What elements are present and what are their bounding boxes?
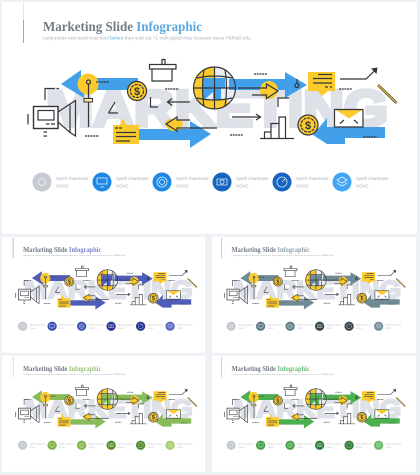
- icon: yellow pin: [78, 74, 98, 127]
- icon: small line arrows and corners: [85, 74, 396, 137]
- panel: indigo slide: [2, 237, 205, 353]
- icon row: labels: Synth chartreuse: [296, 176, 329, 181]
- icon row: XOXO: [297, 447, 303, 449]
- icon: speech bubble bottom: [113, 118, 139, 144]
- icon row: labels: Synth chartreuse: [116, 176, 149, 181]
- icon: bar chart: [260, 117, 294, 138]
- icon: globe: [193, 67, 237, 110]
- icon row: labels: XOXO: [356, 184, 369, 188]
- icon row: Synth chartreuse: [385, 323, 402, 326]
- icon row: XOXO: [177, 447, 183, 449]
- arrow: bottom right: [313, 118, 385, 144]
- icon row: XOXO: [326, 328, 333, 330]
- giant word: MARKETING: [25, 396, 193, 424]
- giant word: MARKETING: [25, 277, 193, 305]
- icon row: XOXO: [238, 447, 244, 449]
- icon row: XOXO: [147, 328, 154, 330]
- icon row: [226, 441, 402, 450]
- icon 1: gray gear: [32, 172, 52, 192]
- icon row: Synth chartreuse: [147, 442, 164, 445]
- panel: main blue slide: [2, 2, 417, 234]
- icon: coin top: $: [134, 86, 140, 98]
- illustration: [224, 385, 405, 429]
- icon row: XOXO: [326, 447, 333, 449]
- icon row: Synth chartreuse: [268, 442, 284, 445]
- accent bar: [23, 2, 24, 43]
- icon row: Synth chartreuse: [59, 323, 76, 326]
- giant word: MARKETING: [233, 277, 401, 305]
- icon row: XOXO: [118, 447, 124, 449]
- giant word: MARKETING: [233, 396, 401, 424]
- icon row: XOXO: [59, 328, 65, 330]
- icon: speech bubble top: [308, 72, 335, 96]
- icon row: Synth chartreuse: [30, 323, 46, 326]
- icon row: labels: Synth chartreuse: [56, 176, 89, 181]
- illustration: arrows and line icons: [28, 60, 396, 148]
- icon row: Synth chartreuse: [297, 323, 314, 326]
- icon: basket: [150, 60, 176, 81]
- accent bar: [12, 357, 15, 377]
- icon row: Synth chartreuse: [385, 442, 402, 445]
- icon row: XOXO: [59, 447, 65, 449]
- panel: light green slide: [2, 356, 205, 472]
- arrow: bottom middle: [139, 121, 211, 148]
- subtitle: Letterpress next level trust fund before they sold out +1 meh gluten-free locavore tacos PBR&B tofu.: [232, 254, 335, 257]
- icon row: Synth chartreuse: [326, 442, 343, 445]
- icon row: Synth chartreuse: [147, 323, 164, 326]
- icon: coin top: [128, 82, 146, 100]
- icon row: XOXO: [297, 328, 303, 330]
- icon: coin bottom: $: [305, 120, 311, 132]
- icon row: XOXO: [30, 328, 36, 330]
- title: Marketing Slide Infographic: [43, 20, 202, 35]
- icon row: XOXO: [30, 447, 36, 449]
- icon row: XOXO: [385, 447, 392, 449]
- icon: arrow outline left: [165, 117, 217, 131]
- icon 2: monitor: [92, 172, 112, 192]
- icon row: XOXO: [118, 328, 124, 330]
- icon row: XOXO: [89, 328, 95, 330]
- icon 3: target: [152, 172, 172, 192]
- icon: coin bottom: [298, 115, 318, 135]
- icon row: XOXO: [268, 447, 274, 449]
- icon row: XOXO: [356, 328, 362, 330]
- subtitle: Letterpress next level trust fund before they sold out +1 meh gluten-free locavore tacos PBR&B tofu.: [232, 373, 335, 376]
- icon row: Synth chartreuse: [118, 442, 135, 445]
- icon row: [226, 322, 402, 331]
- icon row: Synth chartreuse: [30, 442, 46, 445]
- icon 5: gauge: [272, 172, 292, 192]
- icon row: XOXO: [356, 447, 362, 449]
- icon row: XOXO: [89, 447, 95, 449]
- subtitle: Letterpress next level trust fund before they sold out +1 meh gluten-free locavore tacos PBR&B tofu.: [23, 373, 126, 376]
- icon row: labels: Synth chartreuse: [236, 176, 269, 181]
- subtitle: Letterpress next level trust fund before they sold out +1 meh gluten-free locavore tacos PBR&B tofu.: [23, 254, 126, 257]
- icon row: Synth chartreuse: [177, 442, 194, 445]
- icon row: XOXO: [238, 328, 244, 330]
- icon row: Synth chartreuse: [356, 442, 373, 445]
- illustration: [224, 266, 405, 310]
- icon: trend line arrow: [340, 68, 378, 79]
- icon: video camera and screen: [28, 88, 76, 136]
- icon row: labels: XOXO: [176, 184, 189, 188]
- icon row: Synth chartreuse: [89, 323, 105, 326]
- illustration: [16, 385, 197, 429]
- icon row: [18, 441, 194, 450]
- panel: slate slide: [212, 237, 416, 353]
- icon row: labels: XOXO: [236, 184, 249, 188]
- icon: arrow outline right: [238, 81, 278, 99]
- title: Marketing Slide Infographic: [232, 247, 310, 254]
- icon 6: layers: [332, 172, 352, 192]
- arrow: top left: [61, 70, 138, 98]
- icon row: labels: [56, 176, 389, 188]
- icon row: Synth chartreuse: [238, 442, 255, 445]
- icon row: labels: XOXO: [116, 184, 129, 188]
- illustration: [16, 266, 197, 310]
- icon row: XOXO: [147, 447, 154, 449]
- panel: green slide: [212, 356, 416, 472]
- title: Marketing Slide Infographic: [232, 366, 310, 373]
- icon: envelope: [334, 110, 363, 127]
- icon row: Synth chartreuse: [89, 442, 105, 445]
- accent bar: [220, 357, 223, 377]
- giant word MARKETING: MARKETING: [46, 80, 388, 137]
- icon row: Synth chartreuse: [59, 442, 76, 445]
- icon 4: camera: [212, 172, 232, 192]
- title: Marketing Slide Infographic: [23, 366, 101, 373]
- icon row: Synth chartreuse: [118, 323, 135, 326]
- icon row: [18, 322, 194, 331]
- icon row: labels: XOXO: [296, 184, 309, 188]
- icon row: XOXO: [268, 328, 274, 330]
- icon row: labels: Synth chartreuse: [176, 176, 209, 181]
- icon row: XOXO: [385, 328, 392, 330]
- accent bar: [220, 238, 223, 258]
- icon row: Synth chartreuse: [268, 323, 284, 326]
- subtitle: Letterpress next level trust fund before they sold out +1 meh gluten-free locavore tacos PBR&B tofu.: [43, 36, 252, 40]
- icon row: circles: [32, 172, 352, 192]
- icon row: labels: XOXO: [56, 184, 69, 188]
- icon row: Synth chartreuse: [177, 323, 194, 326]
- icon row: Synth chartreuse: [297, 442, 314, 445]
- icon row: Synth chartreuse: [356, 323, 373, 326]
- icon row: Synth chartreuse: [326, 323, 343, 326]
- icon row: XOXO: [177, 328, 183, 330]
- icon: diagonal pencil: [378, 85, 396, 103]
- arrow: top right: [233, 72, 307, 98]
- accent bar: [12, 238, 15, 258]
- title: Marketing Slide Infographic: [23, 247, 101, 254]
- icon row: Synth chartreuse: [238, 323, 255, 326]
- icon row: labels: Synth chartreuse: [356, 176, 389, 181]
